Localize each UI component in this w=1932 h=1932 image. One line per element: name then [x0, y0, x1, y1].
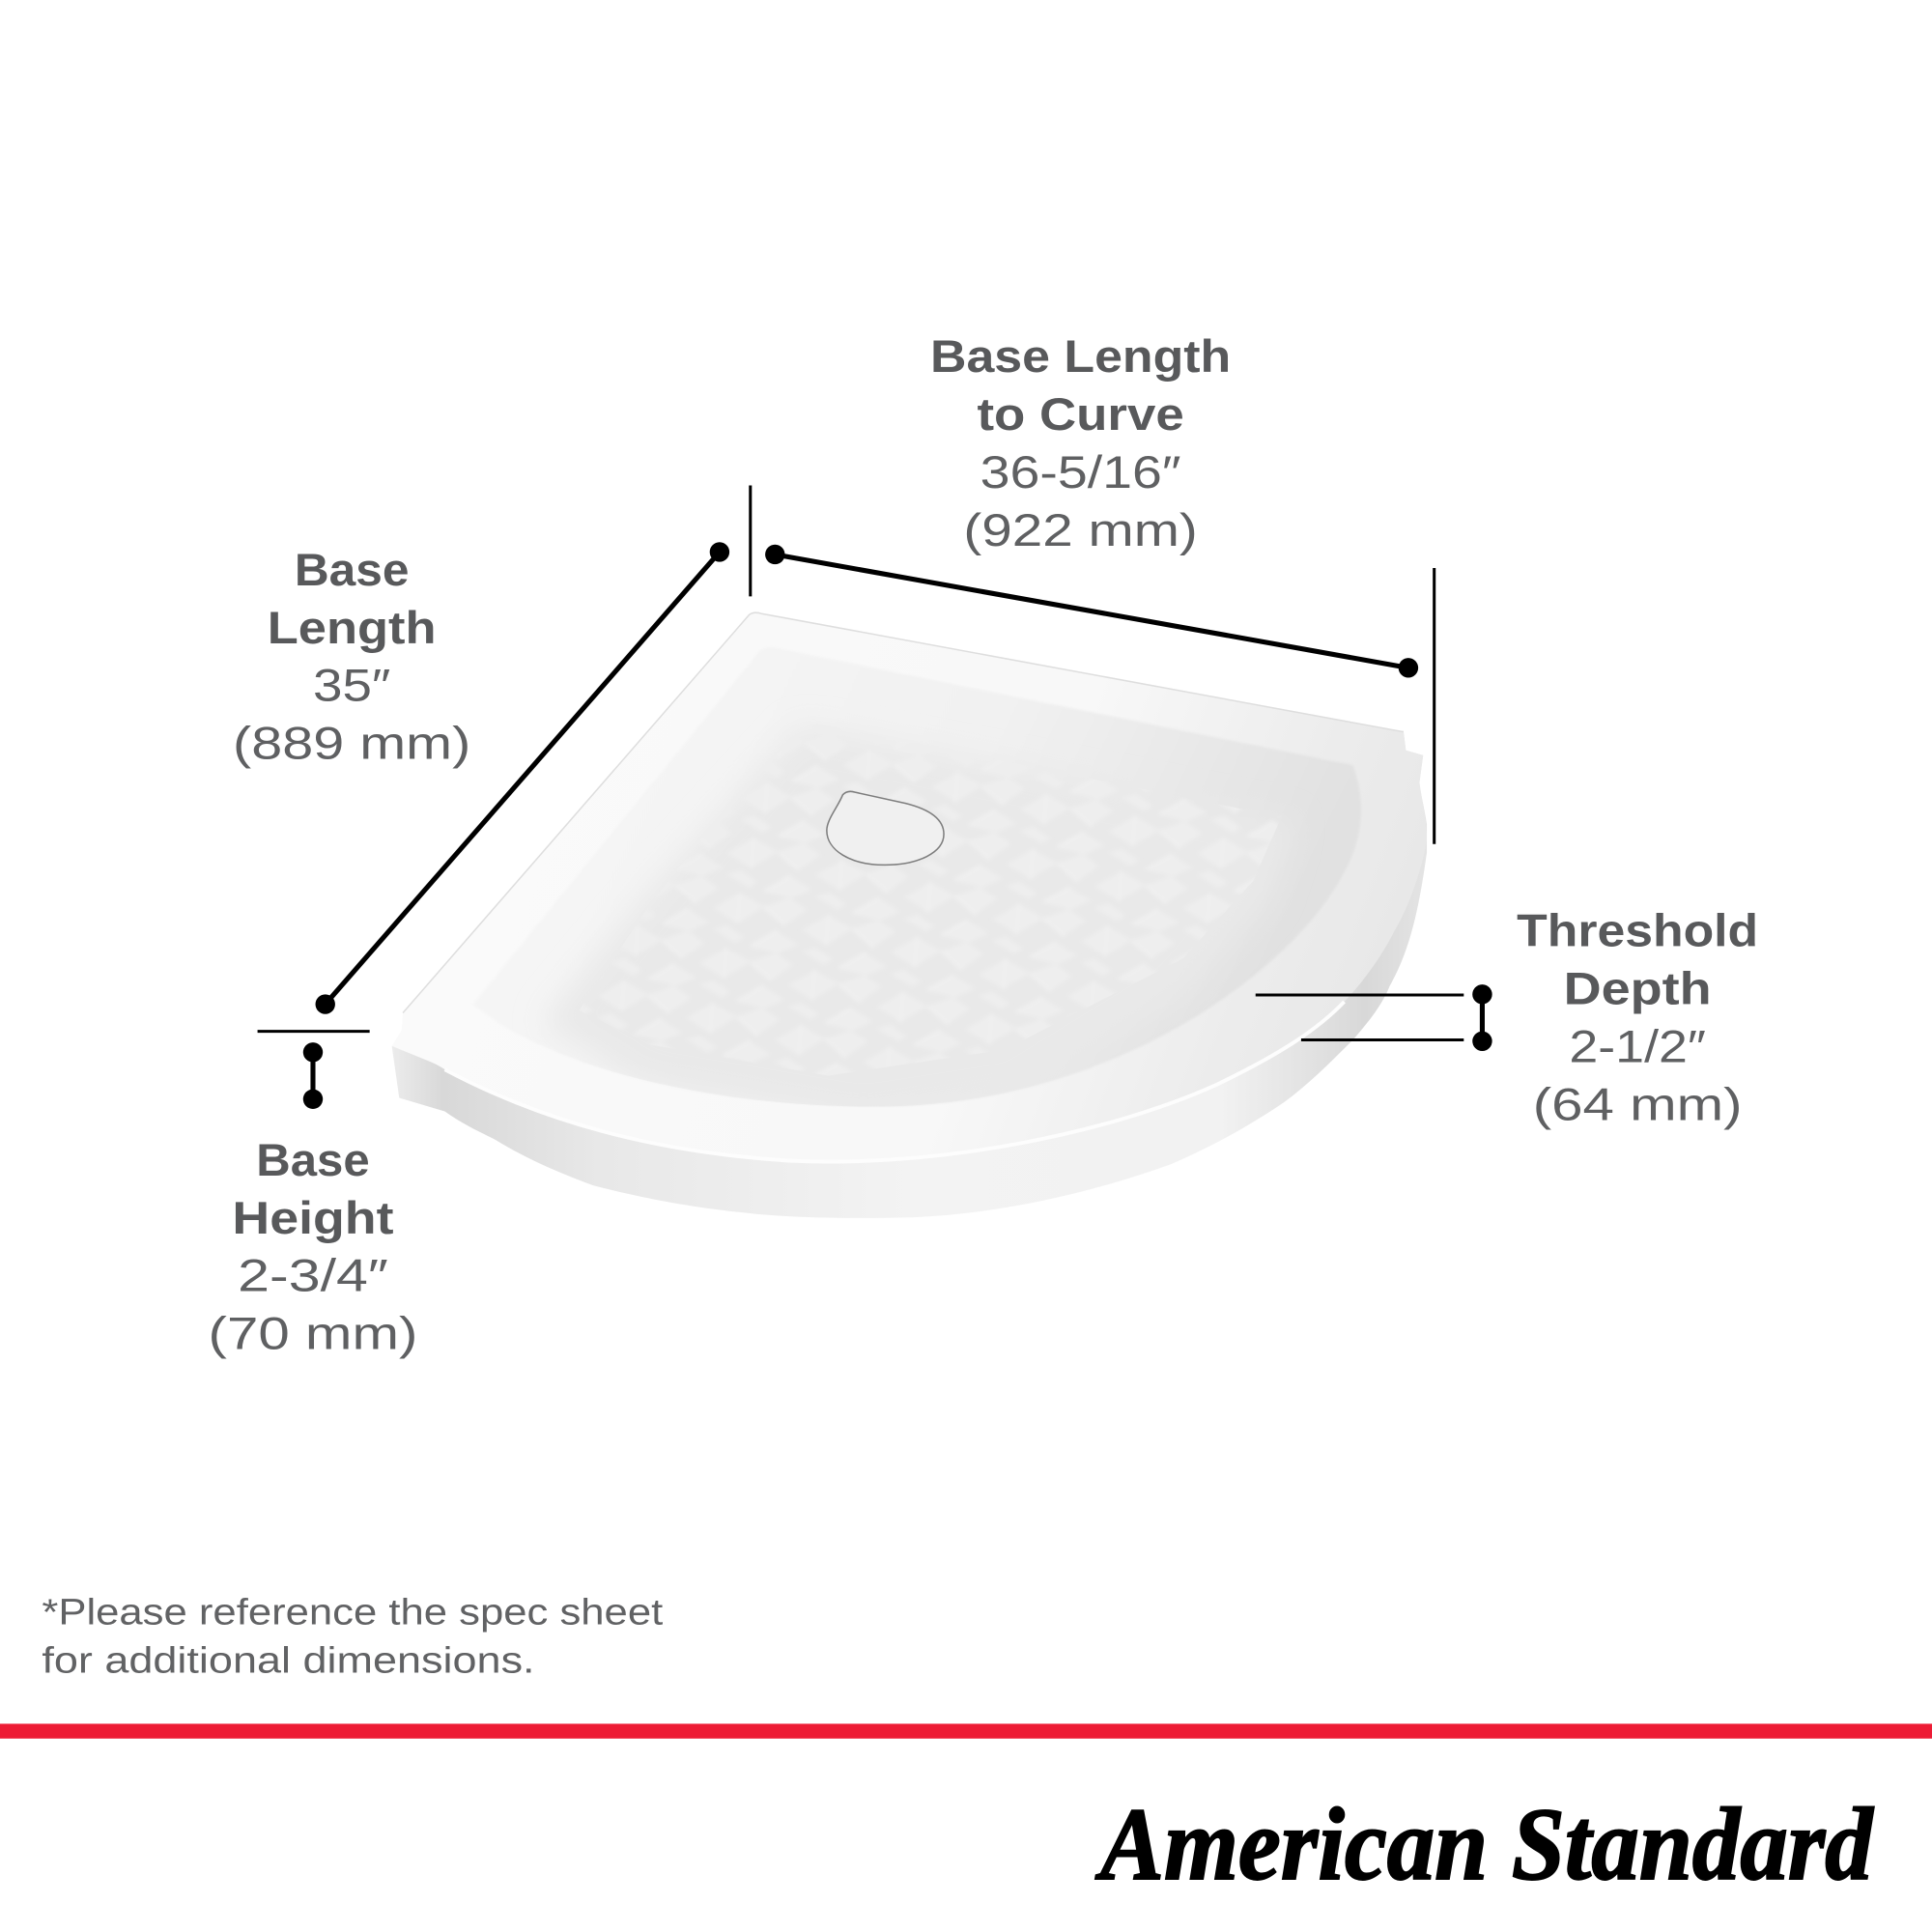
footnote: for additional dimensions.	[42, 1640, 535, 1682]
dimension: threshold depth marker	[1256, 984, 1492, 1051]
label: base length to curve: to Curve	[977, 389, 1184, 440]
dimension: base length to curve line	[765, 545, 1418, 678]
label: threshold depth: Depth	[1564, 964, 1712, 1015]
label: base length: (889 mm)	[233, 719, 470, 770]
label: base length: 35″	[313, 661, 390, 712]
tray outer side wall	[392, 730, 1427, 1218]
label: threshold depth: (64 mm)	[1533, 1079, 1743, 1130]
label: threshold depth	[1517, 906, 1758, 1130]
dimension: base height marker	[258, 1032, 370, 1109]
label: base height: Height	[232, 1193, 394, 1244]
textured floor pattern	[542, 702, 1306, 1096]
tray top rim surface	[392, 612, 1427, 1162]
label: base length to curve: (922 mm)	[963, 505, 1198, 556]
basin floor shading	[564, 748, 912, 1084]
footnote: *Please reference the spec sheet	[42, 1592, 664, 1634]
label: base length	[233, 545, 470, 770]
label: base height	[209, 1135, 417, 1360]
label: base height: Base	[256, 1135, 370, 1186]
red divider bar	[0, 1723, 1932, 1739]
label: threshold depth: 2-1/2″	[1569, 1021, 1706, 1072]
footnote	[42, 1592, 664, 1682]
label: base length to curve: Base Length	[930, 331, 1231, 383]
product: corner shower base	[392, 612, 1427, 1218]
label: threshold depth: Threshold	[1517, 906, 1758, 957]
label: base length to curve: 36-5/16″	[980, 447, 1181, 498]
label: base length: Length	[268, 603, 437, 654]
logo: American Standard: American Standard	[1094, 1788, 1874, 1902]
label: base height: (70 mm)	[209, 1309, 417, 1360]
drain cover	[827, 791, 944, 865]
label: base length to curve	[930, 331, 1231, 556]
extension tick: back corner	[750, 486, 752, 596]
label: base length: Base	[295, 545, 409, 596]
extension tick: curve edge	[1433, 568, 1435, 844]
label: base height: 2-3/4″	[238, 1251, 388, 1302]
front rim highlight	[444, 1002, 1345, 1162]
dimension: base length line	[316, 542, 729, 1014]
tray back and left edge line	[403, 612, 1404, 1012]
basin recess	[473, 647, 1361, 1107]
